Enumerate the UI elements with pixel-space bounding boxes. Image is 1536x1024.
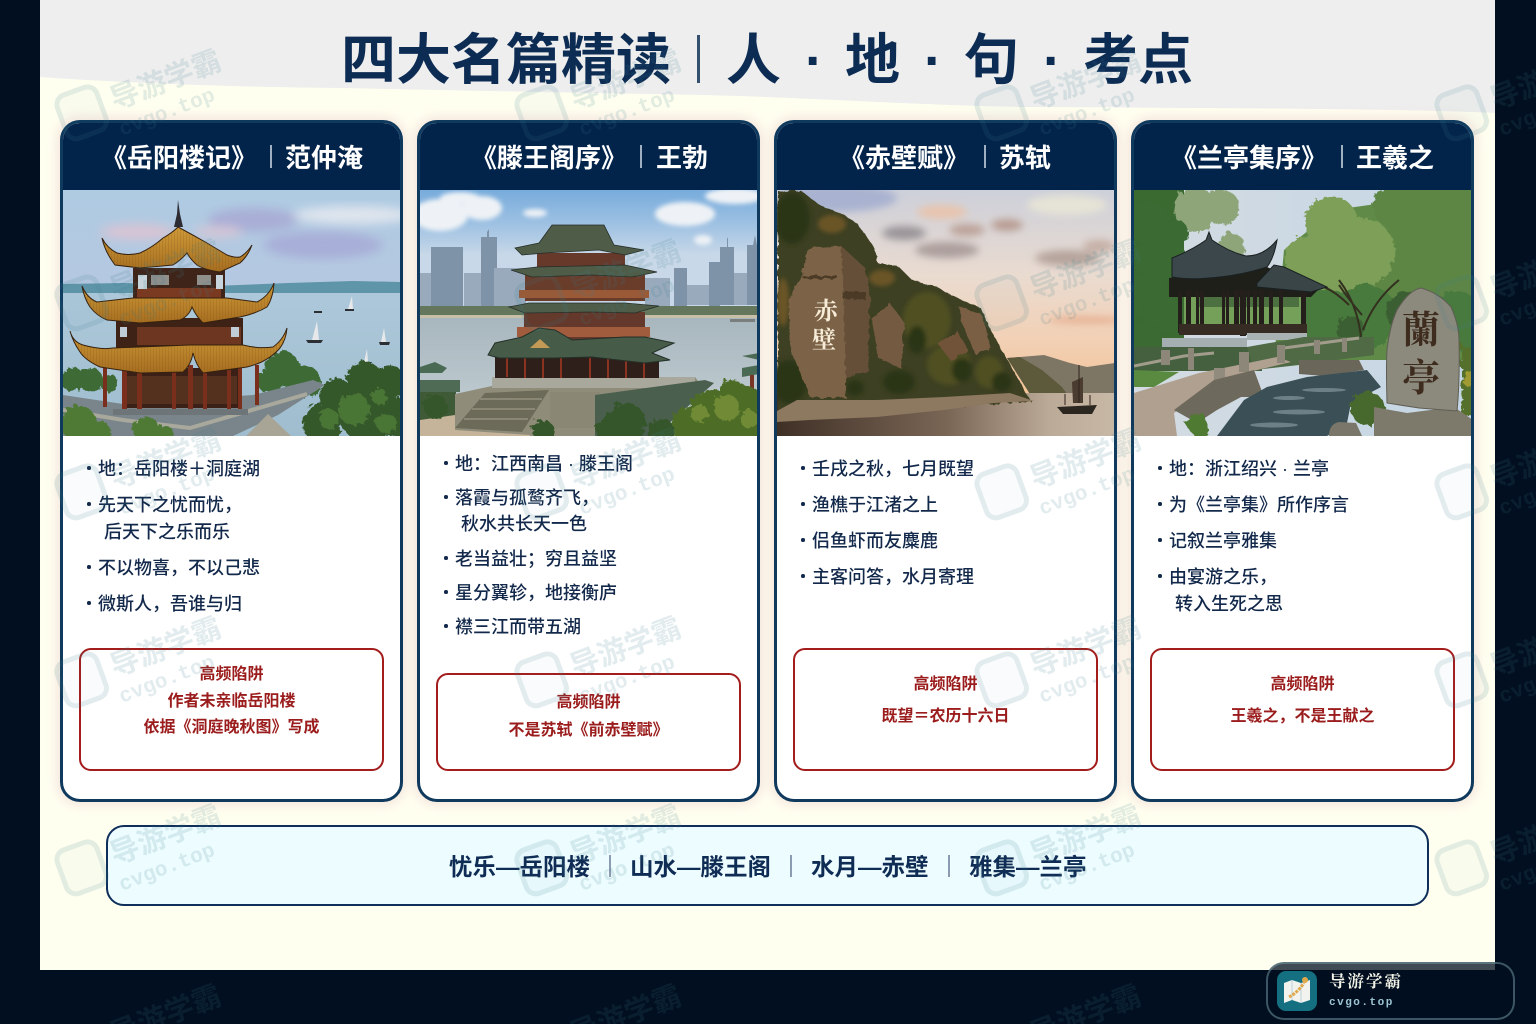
watermark overlay: cvgo.top (1036, 652, 1139, 710)
watermark overlay: cvgo.top (576, 652, 679, 710)
trap box: 王羲之，不是王献之 (1230, 708, 1374, 725)
base platform (455, 377, 705, 436)
card header: 《岳阳楼记》 (101, 143, 257, 173)
cliff mass (777, 190, 1030, 418)
watermark overlay: 导游学霸 (103, 417, 227, 497)
watermark overlay: cvgo.top (576, 85, 679, 143)
photo: 赤壁 (777, 190, 1114, 436)
photo: 兰亭 (1134, 190, 1471, 436)
title: 地 (845, 29, 900, 91)
watermark overlay: 导游学霸 (103, 38, 227, 118)
watermark overlay: 导游学霸 (563, 38, 687, 118)
inscribed stone (1386, 288, 1459, 411)
pavilion (1169, 267, 1321, 297)
panel: 滕王阁序 (417, 120, 760, 802)
card header: 苏轼 (999, 143, 1051, 173)
card header: 《滕王阁序》 (471, 143, 627, 173)
grass left (1134, 370, 1179, 387)
title (341, 29, 1193, 91)
key points: 落霞与孤鹜齐飞， (455, 488, 599, 508)
watermark overlay: cvgo.top (576, 840, 679, 898)
watermark overlay: 导游学霸 (103, 605, 227, 685)
key points: 襟三江而带五湖 (455, 617, 581, 637)
card header: 王羲之 (1356, 143, 1434, 173)
cliff carving: 赤 (814, 291, 840, 326)
key points (87, 459, 260, 614)
watermark overlay: cvgo.top (116, 652, 219, 710)
rock wall (1174, 370, 1264, 423)
watermark overlay: 导游学霸 (1023, 228, 1147, 308)
trap box (79, 648, 384, 771)
far trees (59, 350, 319, 396)
trap box: 高频陷阱 (556, 694, 620, 711)
trap box (793, 648, 1098, 771)
photo: 赤壁: 壁 (812, 320, 836, 355)
card header: 王勃 (656, 143, 708, 173)
pond (1217, 370, 1381, 436)
watermark overlay: cvgo.top (116, 275, 219, 333)
panel: 赤壁赋 (774, 120, 1117, 802)
watermark overlay: 导游学霸 (563, 417, 687, 497)
key points: 侣鱼虾而友麋鹿 (812, 531, 938, 551)
trap box: 不是苏轼《前赤壁赋》 (508, 722, 668, 739)
watermark overlay: cvgo.top (1036, 275, 1139, 333)
key points: 记叙兰亭雅集 (1169, 531, 1277, 551)
bushes (1182, 345, 1475, 437)
key points: 不以物喜，不以己悲 (98, 558, 260, 578)
card header: 《赤壁赋》 (839, 143, 969, 173)
key points (444, 454, 633, 637)
near trees (59, 360, 418, 444)
title: · (805, 29, 823, 91)
card header (774, 120, 1117, 190)
trees (422, 378, 771, 446)
key points: 由宴游之乐， (1169, 567, 1277, 587)
panel: 兰亭集序 (1131, 120, 1474, 802)
watermark overlay: 导游学霸 (1023, 605, 1147, 685)
title: · (924, 29, 942, 91)
title: · (1043, 29, 1061, 91)
key points: 后天下之乐而乐 (104, 522, 230, 542)
summary bar: 山水—滕王阁 (630, 854, 771, 880)
card header (60, 120, 403, 190)
tower body (133, 268, 225, 302)
trap box: 高频陷阱 (913, 676, 978, 693)
side pavilions (420, 353, 759, 422)
rock faces (787, 245, 990, 397)
trap box: 依据《洞庭晚秋图》写成 (143, 719, 320, 736)
title: 人 (726, 29, 781, 91)
foliage backdrop (1274, 190, 1474, 360)
green roofs (509, 225, 659, 313)
summary bar: 雅集—兰亭 (969, 854, 1086, 880)
boat (1057, 365, 1097, 414)
summary bar: 忧乐—岳阳楼 (449, 854, 590, 880)
watermark overlay: 导游学霸 (563, 793, 687, 873)
watermark overlay: 导游学霸 (563, 605, 687, 685)
bridge (1247, 337, 1374, 370)
watermark overlay: 导游学霸 (103, 793, 227, 873)
key points: 微斯人，吾谁与归 (98, 594, 242, 614)
photo: 滕王阁 (420, 190, 757, 436)
key points: 为《兰亭集》所作序言 (1169, 495, 1349, 515)
skyline (431, 237, 759, 308)
watermark overlay: cvgo.top (1036, 85, 1139, 143)
watermark overlay: cvgo.top (116, 85, 219, 143)
key points: 地：江西南昌 · 滕王阁 (455, 454, 633, 474)
title: 考点 (1083, 29, 1193, 91)
key points: 主客问答，水月寄理 (812, 567, 974, 587)
key points: 转入生死之思 (1175, 594, 1283, 614)
watermark overlay: 导游学霸 (1023, 38, 1147, 118)
key points: 地：岳阳楼＋洞庭湖 (98, 459, 260, 479)
brand badge (1266, 962, 1515, 1020)
brand url: cvgo.top (1329, 997, 1394, 1009)
trap box: 作者未亲临岳阳楼 (167, 693, 296, 710)
watermark overlay: cvgo.top (1036, 464, 1139, 522)
key points (801, 459, 974, 587)
brand name: 导游学霸 (1329, 972, 1403, 991)
card header (1131, 120, 1474, 190)
panel: 岳阳楼记 (60, 120, 403, 802)
key points: 星分翼轸，地接衡庐 (455, 583, 617, 603)
watermark overlay: cvgo.top (116, 464, 219, 522)
watermark overlay: cvgo.top (116, 840, 219, 898)
trap box: 高频陷阱 (1270, 676, 1334, 693)
watermark overlay: cvgo.top (576, 464, 679, 522)
photo: 兰亭: 蘭 (1402, 299, 1440, 354)
trap box (436, 673, 741, 771)
tower tiers (537, 253, 625, 269)
watermark overlay: 导游学霸 (563, 228, 687, 308)
icon: map (1277, 971, 1317, 1011)
key points: 老当益壮；穷且益坚 (455, 549, 617, 569)
watermark overlay: 导游学霸 (1023, 793, 1147, 873)
terrace (63, 380, 325, 436)
trap box (1150, 648, 1455, 771)
photo: 兰亭: 亭 (1402, 347, 1440, 402)
card header (417, 120, 760, 190)
watermark overlay: cvgo.top (576, 275, 679, 333)
watermark overlay: 导游学霸 (1023, 417, 1147, 497)
trap box: 既望＝农历十六日 (881, 708, 1010, 725)
card header: 范仲淹 (285, 143, 363, 173)
title: 四大名篇精读 (341, 29, 671, 91)
card header: 《兰亭集序》 (1171, 143, 1327, 173)
watermark overlay: cvgo.top (1036, 840, 1139, 898)
trap box: 高频陷阱 (199, 666, 264, 683)
photo: 岳阳楼 (63, 190, 400, 436)
key points: 秋水共长天一色 (461, 514, 587, 534)
key points: 渔樵于江渚之上 (812, 495, 938, 515)
key points: 先天下之忧而忧， (98, 495, 242, 515)
summary bar: 水月—赤壁 (811, 854, 928, 880)
key points: 壬戌之秋，七月既望 (812, 459, 974, 479)
summary bar (106, 825, 1429, 906)
key points: 地：浙江绍兴 · 兰亭 (1169, 459, 1329, 479)
key points (1158, 459, 1349, 614)
title: 句 (964, 29, 1019, 91)
watermark overlay: 导游学霸 (103, 228, 227, 308)
